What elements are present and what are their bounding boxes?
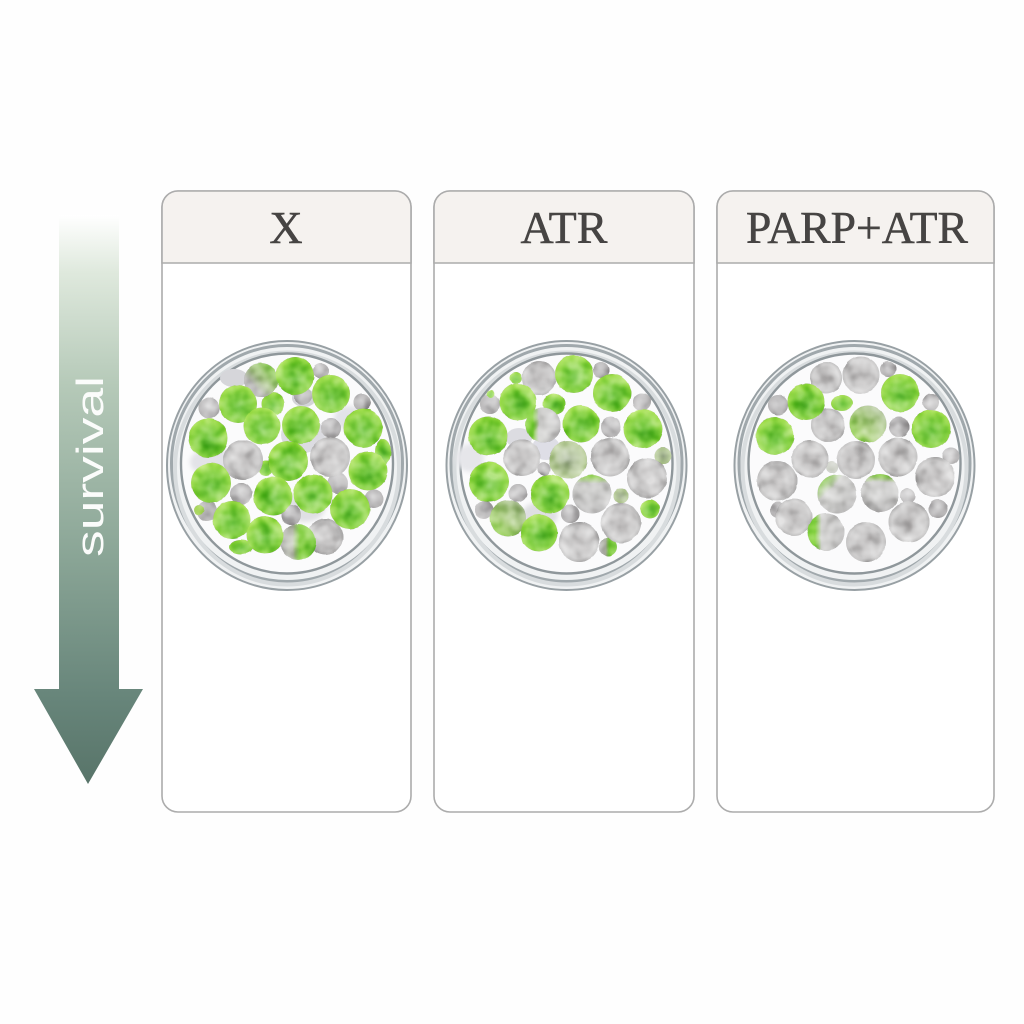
arrow: survival gradient arrow	[34, 215, 143, 784]
petri dish: X	[167, 341, 407, 590]
petri dish: PARP+ATR	[734, 341, 974, 590]
large cells	[188, 357, 388, 560]
small grey cells	[768, 361, 960, 518]
panel header: X	[162, 191, 411, 263]
panel header: PARP+ATR: PARP+ATR	[746, 202, 968, 253]
panel header: PARP+ATR	[717, 191, 994, 263]
panel header: ATR: ATR	[521, 202, 608, 253]
petri dish: ATR	[446, 341, 686, 590]
panel header: ATR	[434, 191, 694, 263]
arrow label: survival	[70, 376, 112, 557]
panel: PARP+ATR	[717, 191, 994, 812]
large cells	[756, 356, 955, 562]
large cells	[468, 355, 667, 562]
panel: ATR	[434, 191, 694, 812]
small grey cells	[475, 362, 672, 556]
panel: X	[162, 191, 411, 812]
panel header: X: X	[269, 202, 303, 253]
small grey cells	[194, 363, 391, 554]
